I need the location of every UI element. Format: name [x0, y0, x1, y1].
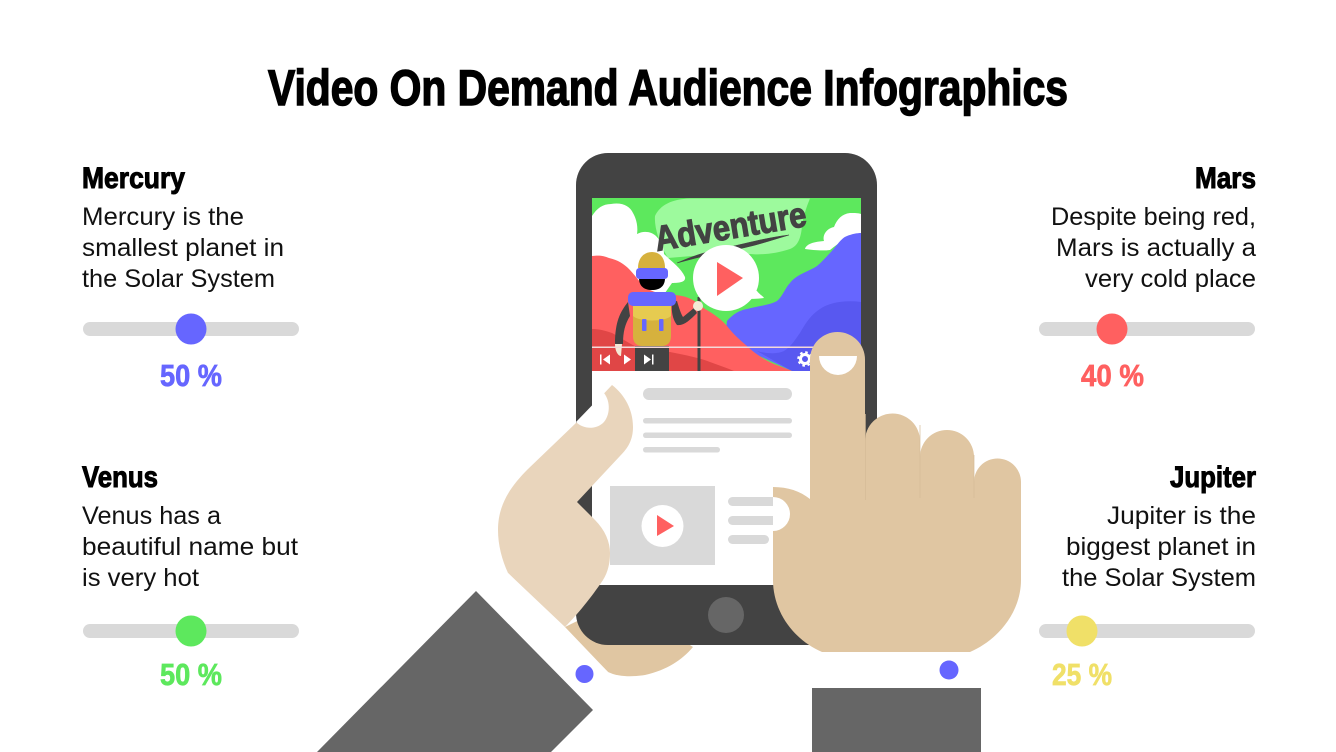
video title: Adventure: Adventure	[652, 195, 809, 259]
left hand	[498, 385, 633, 627]
panel: Jupiter	[1039, 461, 1256, 692]
video background	[592, 198, 861, 371]
legs	[635, 346, 669, 371]
backpack	[633, 304, 671, 346]
thumb nail	[773, 497, 790, 531]
backpack flap	[633, 304, 671, 320]
right cloud	[805, 213, 861, 250]
text: Mercury description	[82, 203, 284, 293]
value: 25%: 25 %	[1052, 657, 1112, 692]
right hand	[773, 332, 1021, 652]
play bubble	[693, 245, 764, 311]
finger separators	[866, 414, 974, 500]
player controls	[600, 354, 654, 364]
panel: Mars	[1039, 162, 1256, 393]
text: Mars description: Mars is actually a	[1056, 234, 1256, 262]
phone screen	[592, 198, 861, 585]
right cuff button	[940, 660, 958, 680]
headband	[636, 268, 668, 279]
hair	[639, 278, 665, 290]
left sleeve	[317, 591, 593, 752]
blue hill	[725, 233, 861, 371]
video thumbnail	[610, 486, 715, 565]
text: Venus description: beautiful name but	[82, 533, 298, 561]
value: 40%: 40 %	[1081, 358, 1144, 393]
home button	[708, 597, 744, 633]
text: Jupiter description: biggest planet in	[1066, 533, 1256, 561]
panel: Venus	[82, 461, 299, 692]
text: Venus description: is very hot	[82, 564, 199, 592]
text: Venus description: Venus has a	[82, 502, 221, 530]
text: Mercury description: Mercury is the	[82, 203, 244, 231]
progress line	[592, 346, 861, 348]
value: 50%: 50 %	[160, 657, 222, 692]
slider: Jupiter 25%	[1039, 616, 1255, 646]
content placeholder lines	[643, 388, 792, 452]
thumbnail caption lines	[728, 497, 778, 544]
text: Mars description	[1051, 203, 1256, 293]
arms	[615, 301, 697, 344]
slider: Venus 50%	[83, 616, 299, 646]
text: Mercury description: smallest planet in	[82, 234, 284, 262]
text: Jupiter description: the Solar System	[1062, 564, 1256, 592]
slider: Mars 40%	[1039, 314, 1255, 344]
left shirt cuff	[476, 573, 608, 710]
phone illustration	[576, 153, 877, 645]
hands	[615, 301, 703, 356]
dark red foreground	[592, 329, 734, 371]
backpack straps	[642, 319, 664, 331]
hat	[638, 252, 665, 268]
text: Jupiter description: Jupiter is the	[1107, 502, 1256, 530]
backpack top roll	[628, 292, 676, 306]
phone body	[576, 153, 877, 645]
left clouds	[592, 203, 685, 300]
dark blue hill	[757, 301, 861, 371]
hiker	[615, 252, 703, 371]
title: Video On Demand Audience Infographics	[268, 60, 1068, 116]
heading: Mercury: Mercury	[82, 162, 185, 195]
light green blob	[655, 198, 810, 258]
hand shape	[498, 385, 633, 627]
left cuff button	[576, 665, 594, 683]
text: Venus description	[82, 502, 298, 592]
index fingernail	[819, 356, 857, 375]
icon: left palm behind phone	[565, 600, 693, 676]
slider: Mercury 50%	[83, 314, 299, 344]
text: Mars description: very cold place	[1085, 265, 1256, 293]
hand shape	[773, 332, 1021, 652]
panel: Mercury	[82, 162, 299, 393]
text: Mars description: Despite being red,	[1051, 203, 1256, 231]
icon: settings gear	[798, 352, 812, 366]
text: Jupiter description	[1062, 502, 1256, 592]
heading: Jupiter: Jupiter	[1170, 461, 1256, 494]
right sleeve	[812, 688, 981, 752]
video player	[592, 195, 861, 371]
staff	[698, 297, 700, 371]
red hill	[592, 256, 792, 371]
heading: Mars: Mars	[1195, 162, 1256, 195]
title underline	[677, 235, 789, 263]
text: Mercury description: the Solar System	[82, 265, 275, 293]
heading: Venus: Venus	[82, 461, 158, 494]
value: 50%: 50 %	[160, 358, 222, 393]
thumbnail nail	[576, 393, 609, 428]
